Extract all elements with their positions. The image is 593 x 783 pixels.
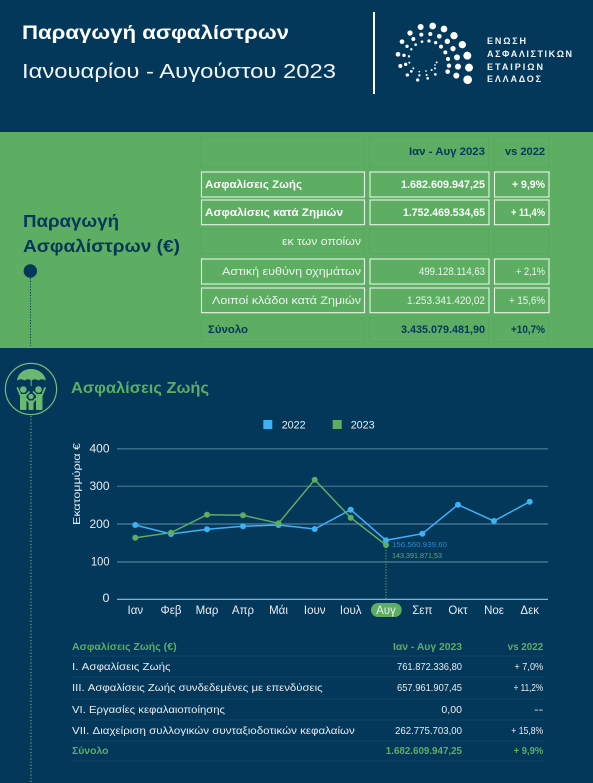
row: non-life insurance: Ασφαλίσεις κατά Ζημιών [205, 207, 343, 219]
row total [72, 745, 544, 757]
logo text: ΑΣΦΑΛΙΣΤΙΚΩΝ [487, 49, 572, 59]
line chart: life premiums by month [71, 443, 548, 617]
logo text: ΕΤΑΙΡΙΩΝ [487, 62, 543, 72]
table header row: vs 2022 [505, 146, 545, 158]
row III [72, 682, 543, 694]
data label: August 2023: 143.391.871,53 [392, 551, 442, 560]
x axis labels: Νοε [484, 605, 504, 617]
row: life insurance: Ασφαλίσεις Ζωής [205, 179, 302, 191]
row VI: -- [534, 704, 544, 716]
y axis labels: 200 [90, 519, 110, 531]
x axis labels: Απρ [232, 605, 255, 617]
legend item: 2022: 2022 [282, 420, 306, 432]
timeline dot [24, 264, 37, 278]
row: non-life insurance: + 11,4% [511, 207, 545, 219]
subtitle: period: Ιανουαρίου - Αυγούστου 2023 [22, 61, 336, 83]
y axis labels: 0 [102, 593, 110, 605]
row: other non-life: 1.253.341.420,02 [407, 295, 485, 307]
series: 2022 [132, 499, 533, 543]
row VII: 262.775.703,00 [395, 725, 462, 737]
table header row [409, 146, 545, 158]
series: 2023 [132, 477, 389, 548]
row I: I. Ασφαλίσεις Ζωής [72, 661, 171, 673]
row VI: VI. Εργασίες κεφαλαιοποίησης [72, 704, 225, 716]
y axis labels: 300 [90, 481, 110, 493]
x axis labels: Οκτ [448, 605, 468, 617]
row: total: Σύνολο [208, 324, 248, 336]
x axis labels: Ιουν [304, 605, 326, 617]
August highlight pill [371, 603, 402, 617]
y axis labels: 100 [91, 556, 110, 568]
row VII [72, 725, 543, 737]
table header row: Ιαν - Αυγ 2023 [409, 146, 485, 158]
row: motor liability [222, 266, 545, 278]
row: motor liability: Αστική ευθύνη οχημάτων [222, 266, 362, 278]
header band [22, 12, 572, 94]
logo text [487, 36, 572, 84]
x axis labels: Ιουλ [340, 605, 362, 617]
row: life insurance: 1.682.609.947,25 [401, 179, 485, 191]
row III: III. Ασφαλίσεις Ζωής συνδεδεμένες με επενδύσεις [72, 682, 323, 694]
row I: + 7,0% [514, 661, 543, 673]
logo text: ΕΛΛΑΔΟΣ [487, 74, 542, 84]
data label: August 2022: 156.560.939,60 [392, 540, 447, 549]
row: other non-life [212, 295, 545, 307]
section heading: Παραγωγή [23, 211, 119, 231]
table header: Ιαν - Αυγ 2023 [393, 641, 462, 653]
x axis labels: Φεβ [161, 605, 182, 617]
header divider [373, 12, 375, 94]
y axis labels: 400 [90, 444, 110, 456]
table header: vs 2022 [508, 641, 543, 653]
timeline dotted connector: navy panel [30, 416, 32, 783]
y axis title: Εκατομμύρια € [71, 443, 83, 525]
row III: 657.961.907,45 [397, 682, 462, 694]
row: total: +10,7% [511, 324, 545, 336]
row total: Σύνολο [72, 745, 108, 757]
legend item: 2023: 2023 [351, 420, 375, 432]
x axis labels [128, 605, 539, 617]
x axis labels: Μαρ [196, 605, 219, 617]
x axis labels: Ιαν [128, 605, 143, 617]
row: other non-life: + 15,6% [509, 295, 545, 307]
icon: association logo dots [396, 23, 473, 84]
row: life insurance [205, 179, 545, 191]
legend [263, 420, 375, 432]
table header [72, 641, 543, 653]
premium table [201, 137, 549, 342]
x axis labels: Δεκ [520, 605, 539, 617]
row: total: 3.435.079.481,90 [401, 324, 485, 336]
logo text: ΕΝΩΣΗ [487, 36, 526, 46]
row III: + 11,2% [514, 682, 543, 694]
row: of which: εκ των οποίων [282, 236, 362, 248]
row VII: VII. Διαχείριση συλλογικών συνταξιοδοτικών κεφαλαίων [72, 725, 355, 737]
row: non-life insurance: 1.752.469.534,65 [403, 207, 485, 219]
row I [72, 661, 543, 673]
y axis labels [90, 444, 110, 605]
title: Παραγωγή ασφαλίστρων [22, 22, 289, 44]
highlighted August guide [385, 547, 387, 599]
row VII: + 15,8% [511, 725, 543, 737]
section heading: life insurance: Ασφαλίσεις Ζωής [71, 380, 209, 397]
row: other non-life: Λοιποί κλάδοι κατά Ζημιών [212, 295, 362, 307]
row VI [72, 704, 544, 716]
table header: Ασφαλίσεις Ζωής (€) [72, 641, 177, 653]
life insurance breakdown table [72, 641, 544, 761]
row total: + 9,9% [514, 745, 544, 757]
panel: premium production (green band) [0, 132, 593, 348]
row total: 1.682.609.947,25 [386, 745, 462, 757]
section heading: Ασφαλίστρων (€) [23, 236, 180, 256]
row: total [208, 324, 545, 336]
timeline dotted connector: green band [30, 278, 32, 346]
x axis labels: Σεπ [412, 605, 432, 617]
x axis labels: Αυγ [376, 605, 396, 617]
row I: 761.872.336,80 [397, 661, 462, 673]
x axis labels: Μάι [269, 605, 288, 617]
row: non-life insurance [205, 207, 545, 219]
row: motor liability: + 2,1% [516, 266, 545, 278]
row: motor liability: 499.128.114,63 [419, 266, 485, 278]
section heading [23, 211, 180, 256]
row VI: 0,00 [441, 704, 462, 716]
icon: umbrella over family [5, 363, 57, 415]
row: life insurance: + 9,9% [512, 179, 545, 191]
